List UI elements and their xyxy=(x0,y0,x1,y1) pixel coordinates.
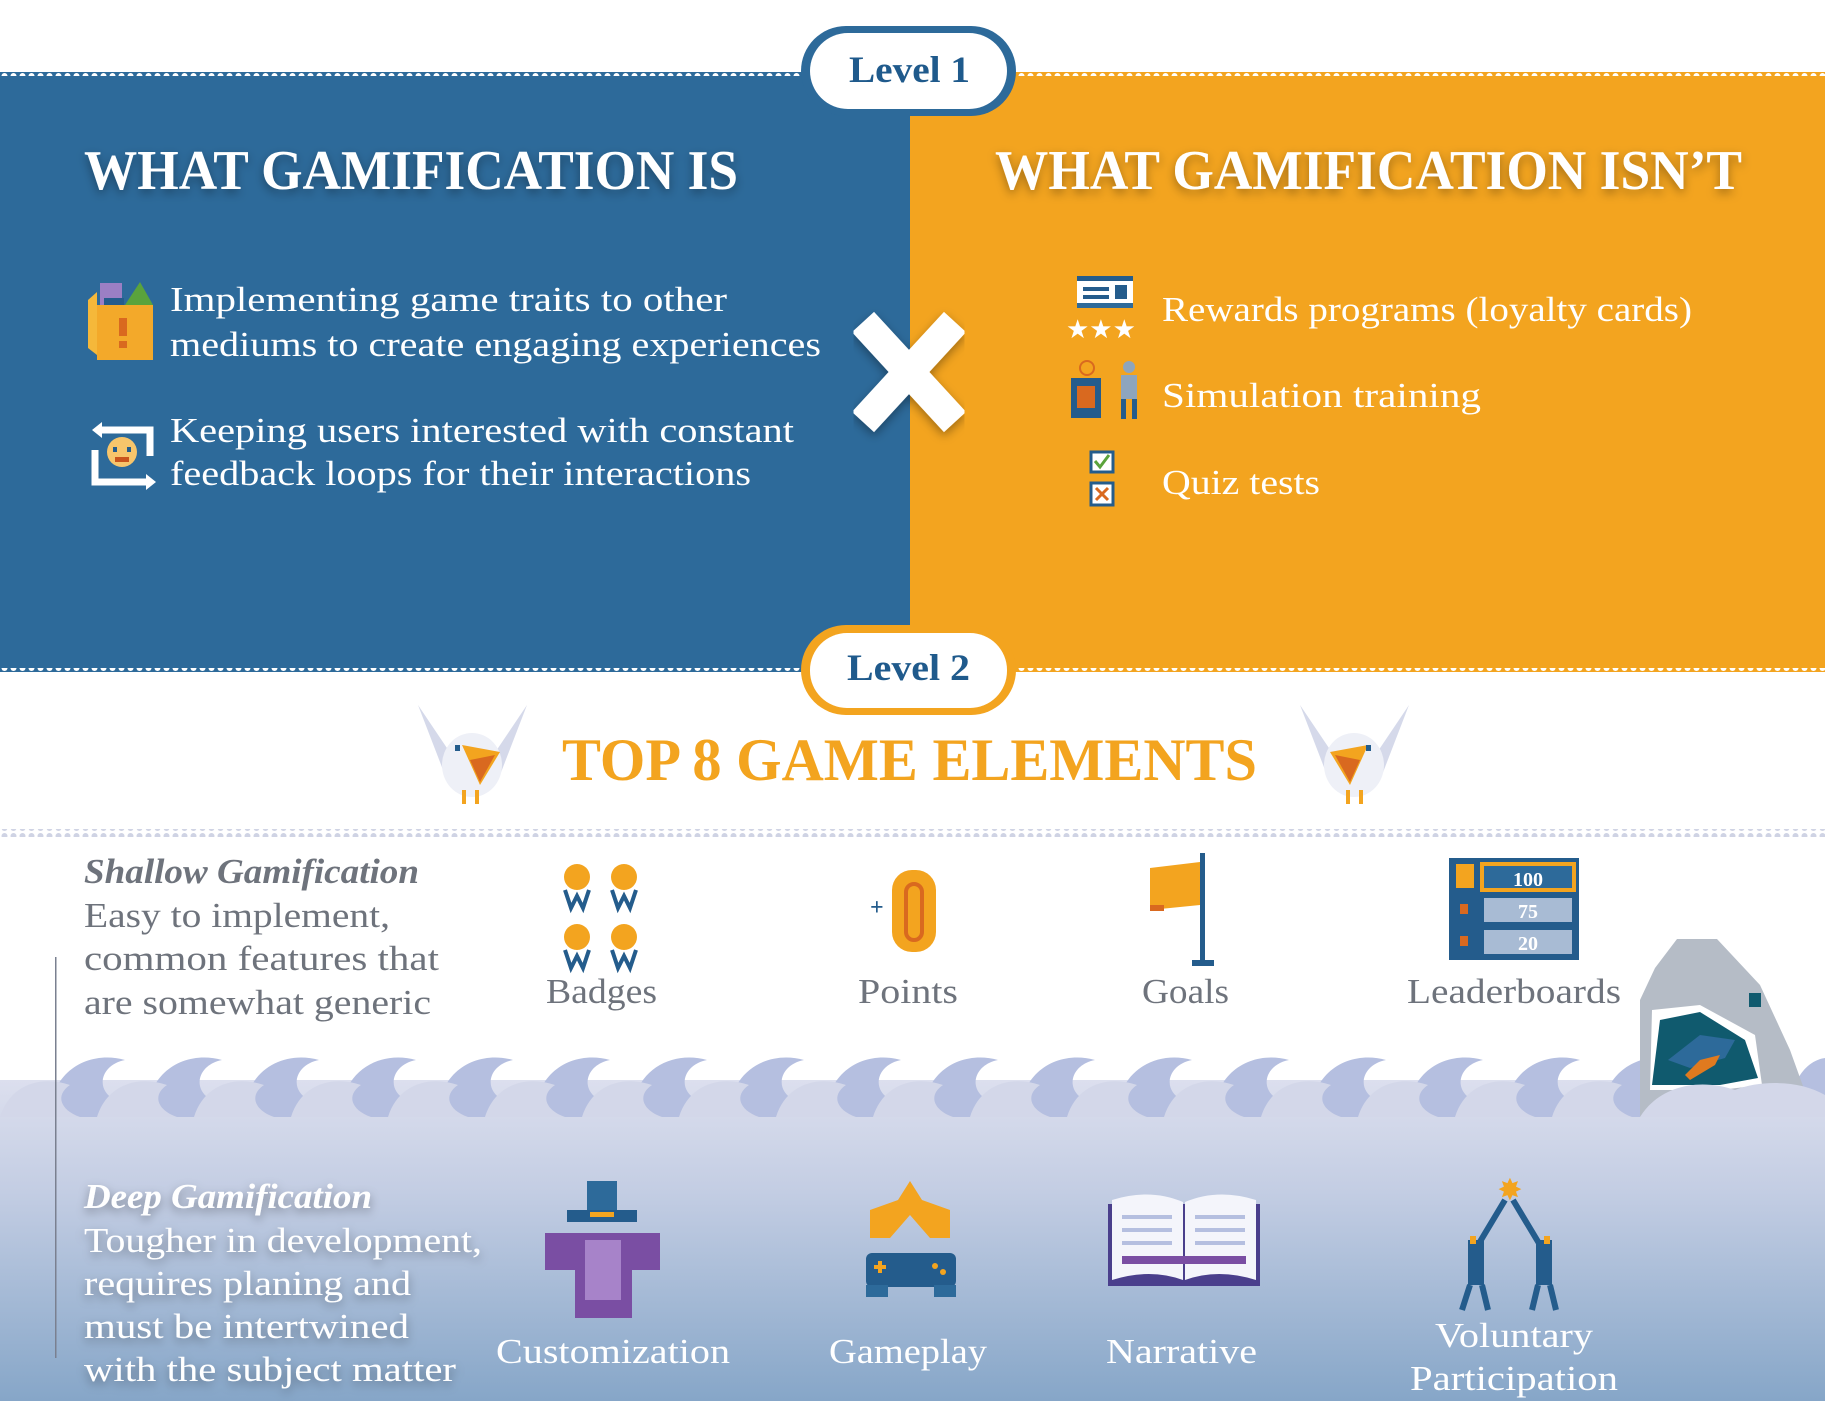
text block: shallow gamification: common features that xyxy=(84,939,439,978)
text: implementing game traits: mediums to create engaging experiences xyxy=(170,325,821,364)
element: customization: Customization xyxy=(496,1332,730,1371)
waves xyxy=(50,1057,1825,1117)
text block: deep gamification: requires planing and xyxy=(84,1264,412,1303)
badge: level 2: Level 2 xyxy=(847,648,970,689)
title: top 8 game elements: TOP 8 GAME ELEMENTS xyxy=(562,727,1257,793)
icon: bird left xyxy=(418,705,527,804)
element: voluntary participation: ✸ xyxy=(1497,1173,1523,1208)
title: what gamification isn't: WHAT GAMIFICATION ISN’T xyxy=(995,140,1742,202)
element: points: Points xyxy=(858,972,958,1011)
title: what gamification is: WHAT GAMIFICATION IS xyxy=(84,140,738,202)
panel: what gamification is xyxy=(0,68,910,676)
text block: shallow gamification: Easy to implement, xyxy=(84,896,390,935)
text: keeping users interested: Keeping users interested with constant xyxy=(170,411,794,450)
element: voluntary participation: Participation xyxy=(1410,1359,1618,1398)
sea background xyxy=(0,1057,1825,1401)
text: implementing game traits: Implementing game traits to other xyxy=(170,280,727,319)
icon: X separator xyxy=(863,322,955,422)
text: implementing game traits xyxy=(170,280,821,364)
element: leaderboards: 100 xyxy=(1513,869,1543,891)
icon: bird right xyxy=(1300,705,1409,804)
text: rewards programs: Rewards programs (loyalty cards) xyxy=(1162,290,1692,329)
badge: level 2 xyxy=(801,625,1016,715)
element: customization xyxy=(496,1181,730,1371)
icon: shark xyxy=(1640,939,1825,1117)
element: narrative xyxy=(1106,1194,1260,1371)
text block: shallow gamification xyxy=(84,852,439,1022)
text block: shallow gamification: are somewhat generic xyxy=(84,983,431,1022)
text block: deep gamification: with the subject matter xyxy=(84,1350,456,1389)
element: gameplay: Gameplay xyxy=(829,1332,988,1371)
badge: level 1: Level 1 xyxy=(849,50,970,91)
element: badges: Badges xyxy=(546,972,657,1011)
element: points: + xyxy=(870,895,884,921)
element: voluntary participation: Voluntary xyxy=(1435,1316,1594,1355)
element: leaderboards xyxy=(1407,858,1621,1011)
element: badges xyxy=(546,864,657,1011)
divider line xyxy=(55,957,56,1358)
panel: what gamification isn't xyxy=(910,68,1825,676)
icon: loyalty card with stars: ★★★ xyxy=(1066,315,1136,345)
badge: level 1 xyxy=(801,26,1016,116)
text block: deep gamification xyxy=(83,1177,482,1389)
text: keeping users interested xyxy=(170,411,794,493)
element: goals: Goals xyxy=(1142,972,1229,1011)
icon: quiz tests xyxy=(1091,452,1113,505)
element: narrative: Narrative xyxy=(1106,1332,1257,1371)
text: simulation training: Simulation training xyxy=(1162,376,1481,415)
element: points xyxy=(858,870,958,1011)
element: leaderboards: 75 xyxy=(1518,901,1538,923)
text: keeping users interested: feedback loops for their interactions xyxy=(170,454,751,493)
element: voluntary participation xyxy=(1410,1173,1618,1398)
text block: deep gamification: Deep Gamification xyxy=(83,1177,372,1216)
icon: loyalty card with stars xyxy=(1066,276,1136,345)
text: quiz tests: Quiz tests xyxy=(1162,463,1320,502)
icon: game box xyxy=(88,282,153,360)
element: gameplay xyxy=(829,1181,988,1371)
text block: shallow gamification: Shallow Gamification xyxy=(84,852,419,891)
text block: deep gamification: must be intertwined xyxy=(84,1307,410,1346)
icon: feedback loop xyxy=(92,422,156,490)
element: leaderboards: 20 xyxy=(1518,933,1538,955)
text block: deep gamification: Tougher in development, xyxy=(84,1221,482,1260)
element: leaderboards: Leaderboards xyxy=(1407,972,1621,1011)
icon: simulation training xyxy=(1071,361,1137,419)
element: goals xyxy=(1142,853,1229,1011)
